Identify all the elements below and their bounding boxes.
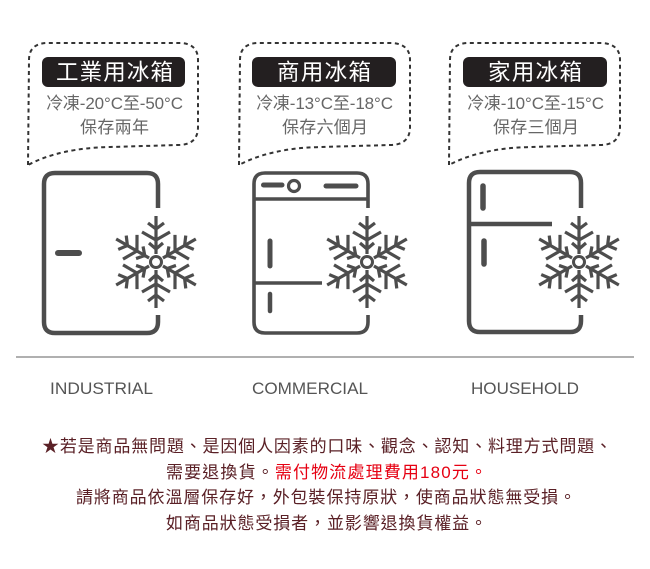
freezer handle	[58, 250, 79, 256]
notice line 1: ★若是商品無問題、是因個人因素的口味、觀念、認知、料理方式問題、	[42, 436, 612, 456]
notice line 4: 如商品狀態受損者，並影響退換貨權益。	[166, 514, 487, 533]
upper handle	[268, 241, 272, 266]
lower handle	[268, 294, 272, 311]
dashed speech bubble	[239, 43, 410, 165]
temperature range: 冷凍-10°C至-15°C	[467, 94, 604, 113]
title text: commercial: 商用冰箱	[277, 60, 371, 85]
panel: household bubble	[449, 43, 620, 165]
top control bar right	[326, 184, 356, 188]
fridge body	[467, 172, 581, 332]
temperature range: 冷凍-13°C至-18°C	[256, 94, 393, 113]
storage time: 保存兩年	[80, 118, 149, 137]
dashed speech bubble	[28, 43, 198, 165]
temperature range: 冷凍-20°C至-50°C	[46, 94, 183, 113]
icon: household fridge with snowflake	[467, 172, 626, 332]
control dial	[288, 180, 300, 192]
notice line 3: 請將商品依溫層保存好，外包裝保持原狀，使商品狀態無受損。	[76, 487, 576, 507]
notice text block	[42, 436, 612, 533]
title text: industrial: 工業用冰箱	[56, 60, 173, 85]
title pill: household	[463, 57, 607, 87]
upper handle	[480, 186, 486, 208]
storage time: 保存三個月	[493, 118, 579, 137]
storage time: 保存六個月	[282, 118, 368, 137]
freezer body	[44, 173, 158, 333]
label: household: HOUSEHOLD	[471, 379, 579, 398]
notice line 2 with red fee: 需要退換貨。需付物流處理費用180元。	[166, 463, 487, 482]
label: industrial: INDUSTRIAL	[50, 379, 153, 398]
icon: industrial freezer with snowflake	[44, 173, 203, 333]
freezer body	[254, 173, 368, 333]
title text: household: 家用冰箱	[488, 60, 582, 85]
lower handle	[481, 241, 487, 264]
panel: industrial bubble	[28, 43, 198, 165]
snowflake	[532, 216, 626, 308]
title pill: industrial	[42, 57, 185, 87]
snowflake	[320, 216, 414, 308]
panel: commercial bubble	[239, 43, 410, 165]
dashed speech bubble	[449, 43, 620, 165]
snowflake	[109, 216, 203, 308]
title pill: commercial	[252, 57, 396, 87]
top control bar left	[264, 182, 282, 188]
label: commercial: COMMERCIAL	[252, 379, 368, 398]
icon: commercial freezer with snowflake	[254, 173, 414, 333]
